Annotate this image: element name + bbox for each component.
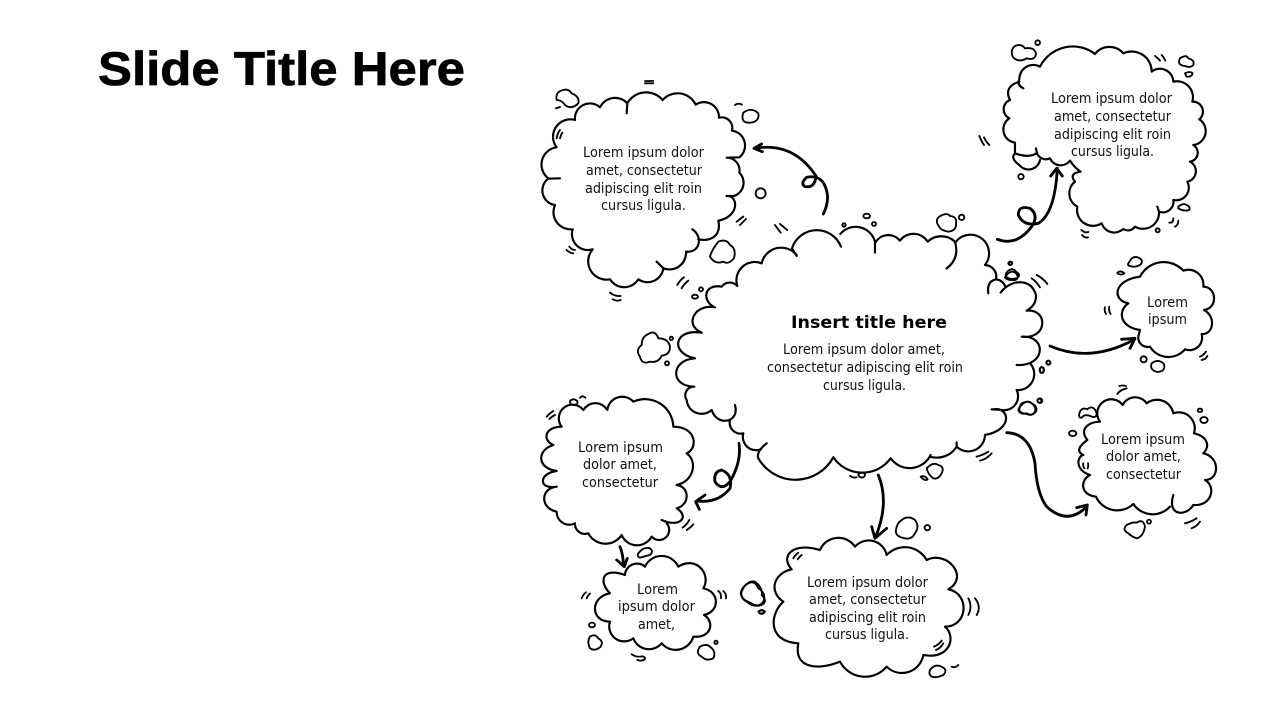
cloud outline bottom <box>741 517 979 677</box>
text central: cursus ligula. <box>823 378 906 394</box>
text top-right: cursus ligula. <box>1071 144 1154 160</box>
text right lower <box>1101 432 1185 483</box>
panel: left cloud <box>541 396 694 545</box>
text top-right <box>1051 91 1172 160</box>
text right lower: consectetur <box>1106 467 1181 483</box>
cloud outline top-right <box>979 40 1206 238</box>
arrow: center to right small cloud <box>1050 338 1135 353</box>
cloud outline top-left <box>541 81 766 301</box>
cloud outline central <box>638 214 1050 480</box>
panel: small bottom-left cloud <box>582 548 765 661</box>
text top-right: Lorem ipsum dolor <box>1051 91 1172 107</box>
text left: consectetur <box>582 475 658 491</box>
text top-right: adipiscing elit roin <box>1054 127 1171 143</box>
text small bottom-left <box>618 582 695 633</box>
panel: bottom cloud <box>741 517 979 677</box>
text right lower: Lorem ipsum <box>1101 432 1185 448</box>
text top-right: amet, consectetur <box>1054 109 1171 125</box>
arrow: center to right lower cloud <box>1007 433 1087 516</box>
title: Slide Title Here <box>98 42 465 95</box>
text right small: Lorem <box>1147 295 1188 311</box>
arrow: center to top-right cloud <box>997 168 1062 241</box>
text central <box>767 313 963 394</box>
text bottom: Lorem ipsum dolor <box>807 575 928 591</box>
text central: Insert title here <box>791 313 947 333</box>
text right small: ipsum <box>1148 312 1187 328</box>
text top-left <box>583 145 704 214</box>
arrow: left cloud to small cloud <box>617 547 627 567</box>
text left: Lorem ipsum <box>578 440 663 456</box>
cloud outline right lower <box>1069 385 1216 538</box>
text bottom: cursus ligula. <box>825 627 909 643</box>
text bottom: adipiscing elit roin <box>809 610 926 626</box>
cloud outline small bottom-left <box>582 548 765 661</box>
panel: top-right cloud <box>979 40 1206 238</box>
text top-left: adipiscing elit roin <box>585 181 702 197</box>
arrow: center to bottom cloud <box>872 475 887 538</box>
text central: Lorem ipsum dolor amet, <box>783 342 945 358</box>
text small bottom-left: amet, <box>638 617 675 633</box>
cloud outline right small <box>1105 257 1214 372</box>
text top-left: Lorem ipsum dolor <box>583 145 704 161</box>
text left <box>578 440 663 491</box>
panel: right small cloud <box>1105 257 1214 372</box>
text top-left: amet, consectetur <box>586 163 702 179</box>
text small bottom-left: Lorem <box>637 582 678 598</box>
text right lower: dolor amet, <box>1106 449 1181 465</box>
decorative puffs beside central cloud <box>1005 262 1050 415</box>
panel: top-left cloud <box>541 81 766 301</box>
text bottom <box>807 575 928 643</box>
text central: consectetur adipiscing elit roin <box>767 360 963 376</box>
panel: right lower cloud <box>1069 385 1216 538</box>
arrow: center to left cloud <box>696 443 739 509</box>
text top-left: cursus ligula. <box>601 198 686 214</box>
text bottom: amet, consectetur <box>809 592 926 608</box>
text right small <box>1147 295 1188 328</box>
text left: dolor amet, <box>583 457 657 473</box>
text small bottom-left: ipsum dolor <box>618 599 695 615</box>
cloud outline left <box>541 396 694 545</box>
arrow: center to top-left cloud <box>754 144 828 214</box>
panel: central cloud <box>638 214 1050 480</box>
